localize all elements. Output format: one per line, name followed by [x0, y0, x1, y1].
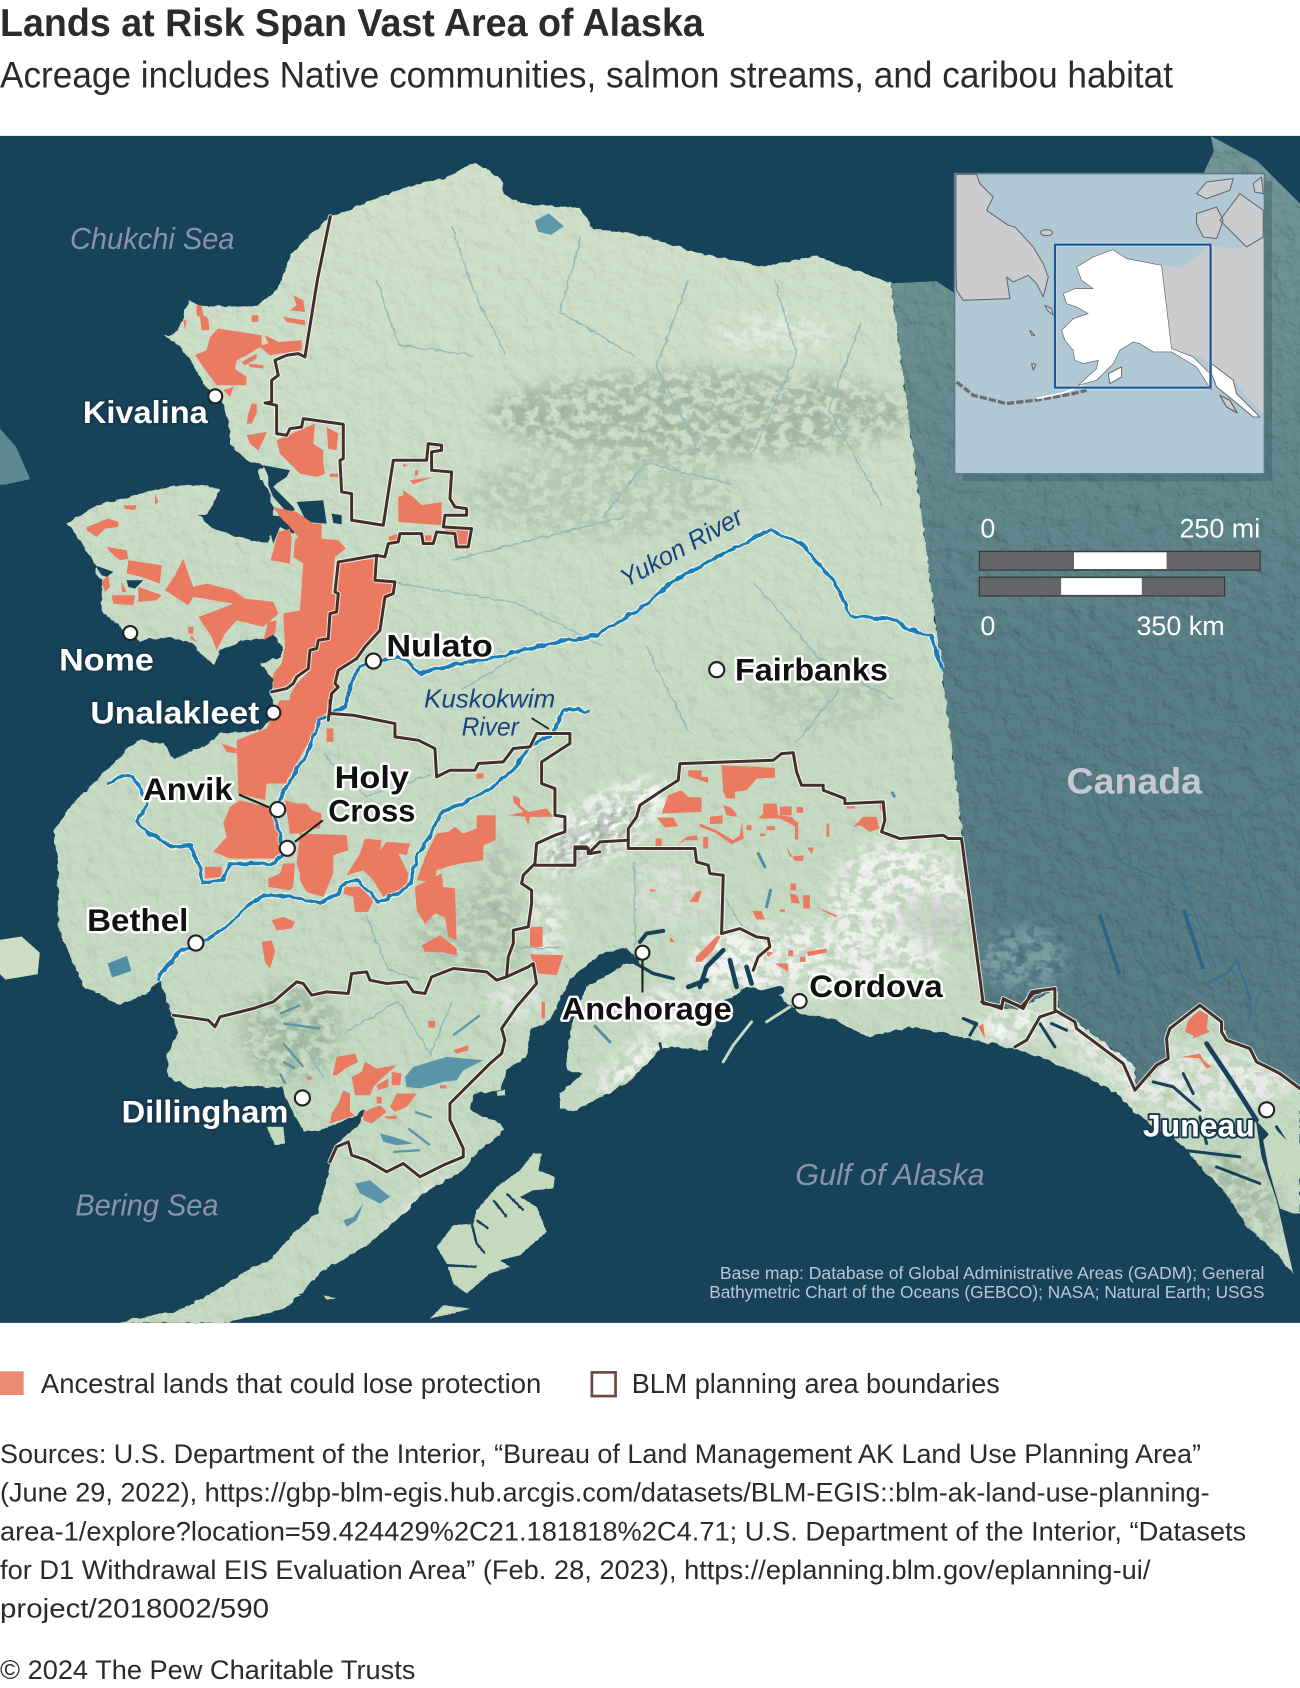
legend label: BLM boundaries: BLM planning area boundaries: [632, 1368, 1000, 1399]
sources: [0, 1439, 1246, 1624]
interior and Copper River lands: [650, 765, 883, 972]
legend swatch: BLM boundaries: [592, 1372, 616, 1396]
scale bar: 350 km: [1136, 611, 1225, 641]
locator inset map: [955, 174, 1272, 481]
panel: map: [0, 129, 1300, 1323]
place names: Fairbanks: [735, 652, 888, 687]
sources: for D1 Withdrawal EIS Evaluation Area” (Feb. 28, 2023), https://eplanning.blm.gov/eplanning-ui/: [0, 1555, 1151, 1585]
Cook Inlet arms and Prince William Sound fjords: [580, 931, 977, 1062]
scale bar: 0: [980, 513, 995, 543]
sea labels: [70, 223, 985, 1222]
southeast lands: [978, 1010, 1212, 1069]
sources: Sources: U.S. Department of the Interior, “Bureau of Land Management AK Land Use Planning Area”: [0, 1439, 1201, 1469]
Yukon River label: Yukon River: [616, 502, 749, 593]
scale bar: [979, 513, 1260, 641]
sources: area-1/explore?location=59.424429%2C21.181818%2C4.71; U.S. Department of the Interior, “Datasets: [0, 1516, 1246, 1546]
sources: project/2018002/590: [0, 1594, 269, 1624]
Yukon-Kuskokwim lands: [205, 700, 563, 1019]
Kuskokwim River label: Kuskokwim: [424, 685, 555, 713]
Siberia and Nunivak island fragments: [0, 429, 40, 980]
place names: Cross: [328, 793, 415, 828]
Kodiak and other islands: [267, 1090, 555, 1319]
copyright: © 2024 The Pew Charitable Trusts: [0, 1655, 415, 1685]
place names: Nulato: [386, 629, 493, 664]
ocean background: [0, 136, 1300, 1323]
northwest lands: [87, 295, 468, 720]
Panhandle channels: [963, 1019, 1300, 1274]
city markers: [123, 389, 1274, 1117]
BLM planning area boundaries: [173, 217, 1300, 1177]
place names: [59, 395, 1255, 1144]
Bristol Bay lands: [307, 1021, 468, 1124]
place names: Unalakleet: [90, 695, 259, 730]
Kuskokwim River label: [424, 685, 555, 741]
lakes: [280, 1005, 483, 1227]
place names: Anvik: [143, 772, 233, 807]
base map credit: Base map: Database of Global Administrative Areas (GADM); General: [720, 1263, 1264, 1283]
Kuskokwim River label: River: [462, 713, 520, 741]
place names: Juneau: [1143, 1109, 1255, 1144]
scale bar: 250 mi: [1179, 513, 1260, 543]
place names: Nome: [59, 643, 154, 678]
legend: [0, 1368, 1000, 1399]
Canada landmass: [882, 129, 1300, 1098]
place names: Cordova: [809, 969, 943, 1004]
Kotzebue Sound lagoons: [95, 465, 342, 589]
Alaska landmass: [0, 136, 1300, 1323]
Canada label: Canada: [1066, 760, 1203, 801]
inland water and fjords: [95, 213, 1300, 1274]
sources: (June 29, 2022), https://gbp-blm-egis.hub.arcgis.com/datasets/BLM-EGIS::blm-ak-land-use-planning-: [0, 1478, 1210, 1508]
place label leaders: [239, 794, 642, 993]
base map credit: Bathymetric Chart of the Oceans (GEBCO); NASA; Natural Earth; USGS: [709, 1282, 1264, 1302]
place names: Anchorage: [562, 991, 732, 1026]
place names: Holy: [335, 760, 410, 795]
sea labels: Gulf of Alaska: [795, 1159, 985, 1192]
Kuskokwim River: [158, 708, 590, 981]
place names: Bethel: [87, 903, 188, 938]
ancestral lands that could lose protection: [87, 295, 1212, 1124]
title: Lands at Risk Span Vast Area of Alaska: [0, 2, 704, 45]
base map credit: [709, 1263, 1264, 1302]
place names: Dillingham: [122, 1095, 288, 1130]
Yukon River: [108, 530, 942, 883]
subtitle: Acreage includes Native communities, salmon streams, and caribou habitat: [0, 53, 1174, 95]
sea labels: Bering Sea: [75, 1189, 218, 1222]
sea labels: Chukchi Sea: [70, 223, 235, 256]
legend label: ancestral lands: Ancestral lands that could lose protection: [41, 1368, 541, 1399]
scale bar: 0: [980, 611, 995, 641]
place names: Kivalina: [83, 395, 208, 430]
legend swatch: ancestral lands: [0, 1371, 24, 1395]
